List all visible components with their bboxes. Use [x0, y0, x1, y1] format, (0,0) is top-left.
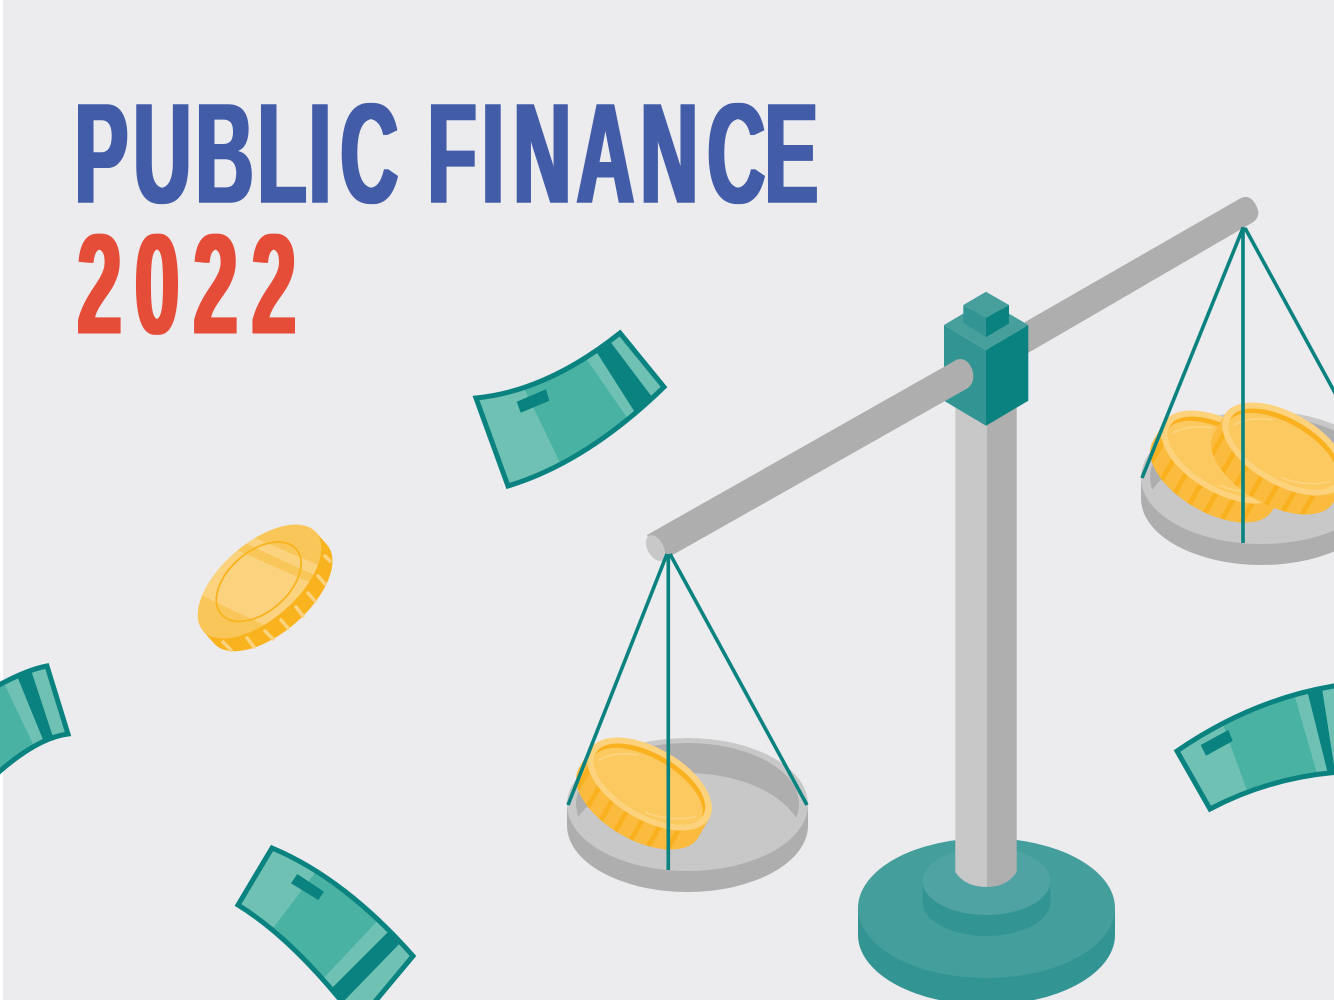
title: Public Finance: PUBLIC FINANCE [75, 73, 818, 234]
junction block [944, 292, 1028, 426]
banknote: top centre [472, 330, 668, 490]
banknote: bottom left [234, 844, 416, 1000]
banknote: right edge [1174, 683, 1334, 812]
column [955, 400, 1017, 887]
subtitle: year 2022: 2022 [77, 204, 296, 364]
left white edge strip [0, 0, 3, 1000]
beam: left arm [642, 359, 973, 564]
left pan strings [568, 554, 807, 870]
beam: right arm [1025, 197, 1258, 353]
balance scale [555, 197, 1334, 1000]
right pan strings [1142, 227, 1334, 543]
scale base [858, 838, 1115, 1000]
left pan with coin [555, 718, 808, 913]
gold coin: floating [198, 524, 332, 652]
banknote: left edge [0, 663, 72, 774]
right pan with coins [1129, 383, 1334, 586]
